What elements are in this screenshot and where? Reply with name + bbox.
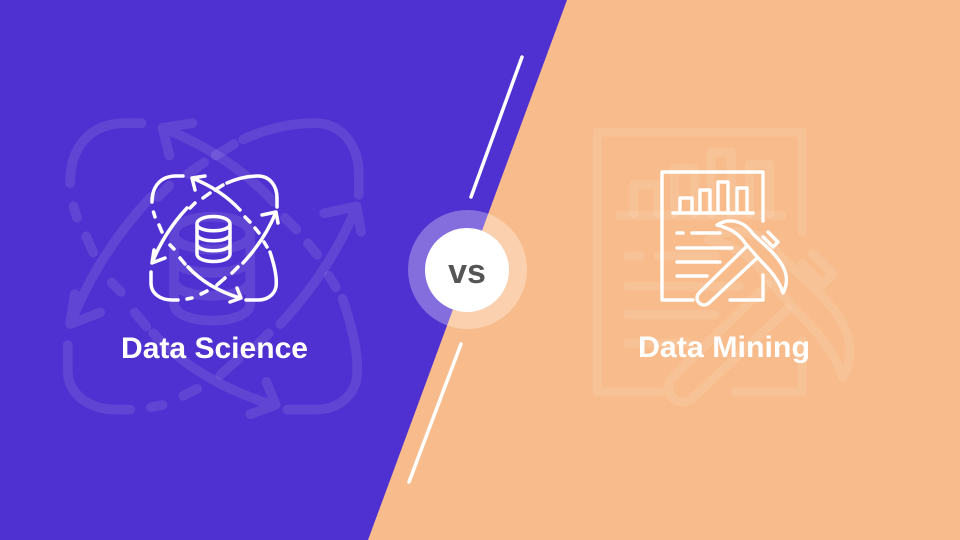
divider line: upper <box>471 57 522 197</box>
icon: report with pickaxe <box>662 172 786 305</box>
icon: data science atom with database <box>151 176 278 302</box>
heading: Data Mining: Data Mining <box>638 331 810 364</box>
divider line: lower <box>409 344 461 482</box>
badge: vs <box>408 210 527 329</box>
badge: vs: vs <box>448 253 486 291</box>
heading: Data Science: Data Science <box>121 332 308 365</box>
icon: data science watermark <box>68 123 361 414</box>
panel: data science background <box>0 0 567 540</box>
icon: data mining watermark <box>597 132 850 402</box>
